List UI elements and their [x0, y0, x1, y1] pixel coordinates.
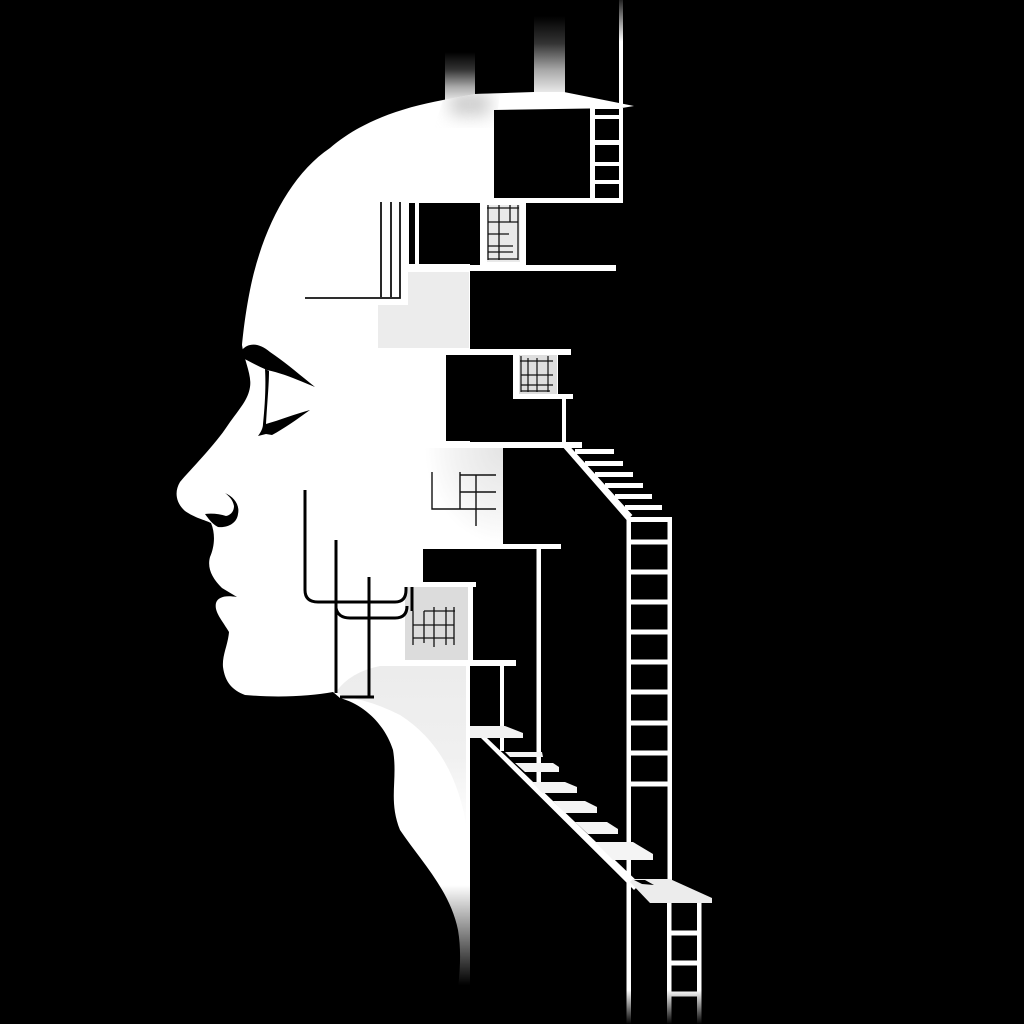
upper diagonal stair — [565, 448, 662, 519]
post: short — [500, 666, 504, 751]
forehead thin lines — [305, 202, 400, 298]
head silhouette — [177, 100, 494, 1024]
room block: light panel with grid — [425, 448, 503, 544]
lower platform — [630, 879, 712, 903]
bottom fade: neck — [380, 885, 475, 985]
eyebrow — [242, 345, 315, 387]
shelf: third row — [445, 349, 571, 355]
shelf: seventh row — [405, 660, 516, 666]
grid cell: lower — [405, 587, 473, 662]
bottom fade fill — [380, 985, 475, 1024]
chimneys — [445, 0, 623, 104]
shelf: second row — [407, 265, 616, 271]
shelf: small ledge — [558, 394, 573, 399]
bottom fade: ladders — [620, 990, 710, 1024]
grid cell: upper — [487, 205, 520, 262]
post: long — [536, 549, 541, 789]
room: fifth row — [423, 549, 470, 582]
neck grey panel — [336, 666, 467, 830]
closed eye — [258, 369, 310, 436]
room: second row black rooms — [409, 203, 526, 265]
post: third row — [562, 399, 566, 442]
lower diagonal stair — [470, 726, 653, 890]
grid cell: middle — [513, 355, 558, 399]
neck strip — [466, 666, 470, 1024]
shelf: fifth row — [423, 544, 561, 549]
short ladder — [667, 903, 702, 1024]
chin pipes — [305, 490, 412, 698]
tall ladder — [626, 517, 672, 1024]
shelf: sixth row — [423, 582, 476, 587]
roof shading — [450, 92, 490, 116]
shelf: fourth row — [446, 442, 582, 448]
illustration: head profile with architecture — [176, 0, 712, 1023]
roof — [440, 92, 634, 118]
room: top black room with ladder — [494, 108, 623, 203]
room: third row — [446, 355, 562, 441]
nostril — [205, 493, 238, 527]
grey block — [378, 272, 469, 348]
